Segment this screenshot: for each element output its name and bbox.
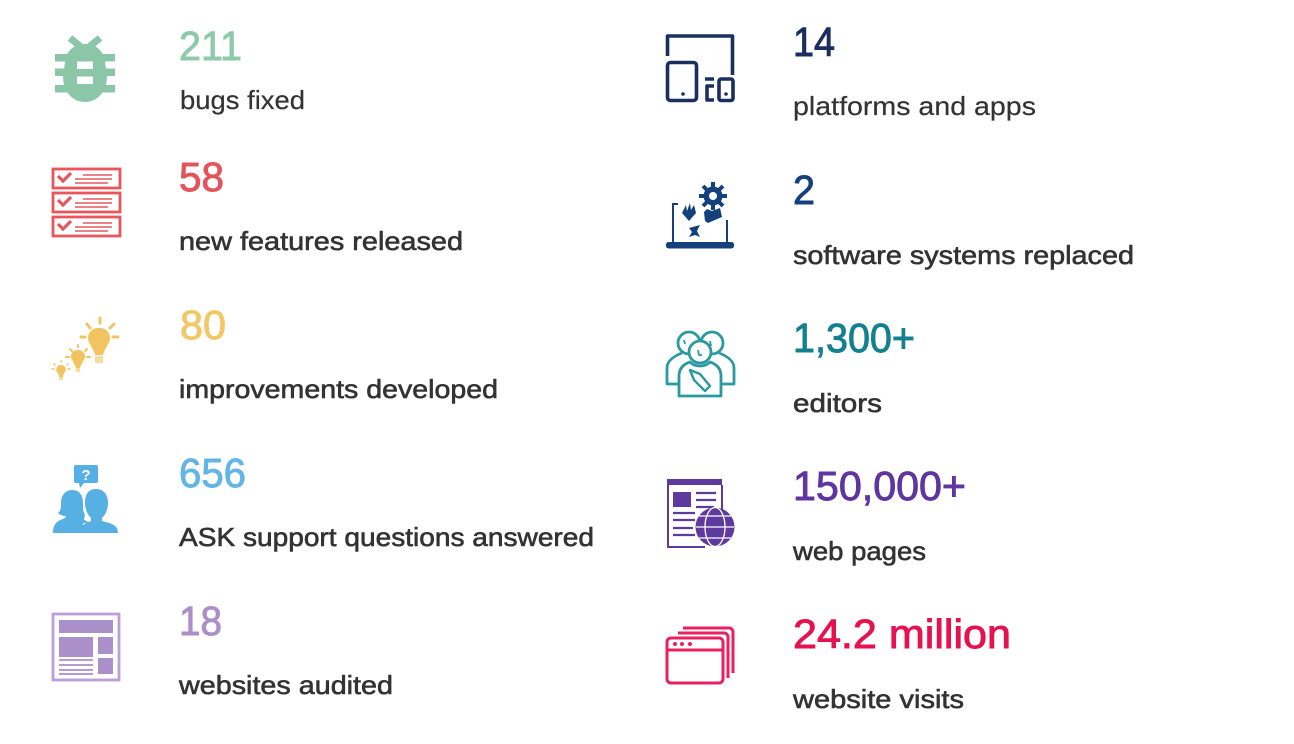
stat: platforms and apps: [668, 19, 1036, 121]
number: 18: 18: [179, 598, 222, 644]
label: bugs fixed: bugs fixed: [180, 85, 305, 115]
stat: bugs fixed: [55, 23, 305, 115]
stat: websites audited: [53, 598, 393, 700]
number: 2: 2: [793, 167, 815, 213]
label: platforms and apps: platforms and apps: [793, 91, 1036, 121]
label: improvements developed: improvements developed: [179, 374, 498, 404]
label: new features released: new features released: [179, 226, 463, 256]
icon: bug: [55, 38, 115, 102]
stat: web pages: [667, 463, 966, 566]
icon: devices: [668, 36, 733, 100]
label: ASK support questions answered: ASK support questions answered: [179, 522, 594, 552]
number: 1,300+: 1,300+: [793, 315, 915, 361]
label: software systems replaced: software systems replaced: [793, 240, 1134, 270]
icon: website layout: [53, 614, 119, 680]
number: 80: 80: [180, 302, 226, 348]
number: 24.2 million: 24.2 million: [793, 611, 1011, 657]
icon: browser windows: [667, 628, 733, 683]
icon: checklist: [53, 169, 120, 236]
number: 14: 14: [793, 19, 835, 65]
number: 58: 58: [179, 154, 224, 200]
icon: laptop with gear: [666, 182, 734, 248]
number: 211: 211: [179, 23, 242, 69]
label: websites audited: websites audited: [178, 670, 393, 700]
icon: web page and globe: [667, 479, 734, 548]
stat: software systems replaced: [666, 167, 1134, 270]
icon: people with question: ?: [81, 467, 91, 484]
stat: new features released: [53, 154, 463, 256]
label: web pages: web pages: [792, 536, 926, 566]
number: 656: 656: [179, 450, 246, 496]
label: website visits: website visits: [792, 684, 964, 714]
label: editors: editors: [793, 388, 882, 418]
number: 150,000+: 150,000+: [793, 463, 966, 509]
icon: people with question: [53, 465, 118, 533]
stat: ASK support questions answered: [53, 450, 594, 552]
icon: editors group: [667, 332, 734, 396]
stat: website visits: [667, 611, 1011, 714]
stat: editors: [667, 315, 915, 418]
icon: light bulbs: [52, 318, 118, 380]
stat: improvements developed: [52, 302, 498, 404]
